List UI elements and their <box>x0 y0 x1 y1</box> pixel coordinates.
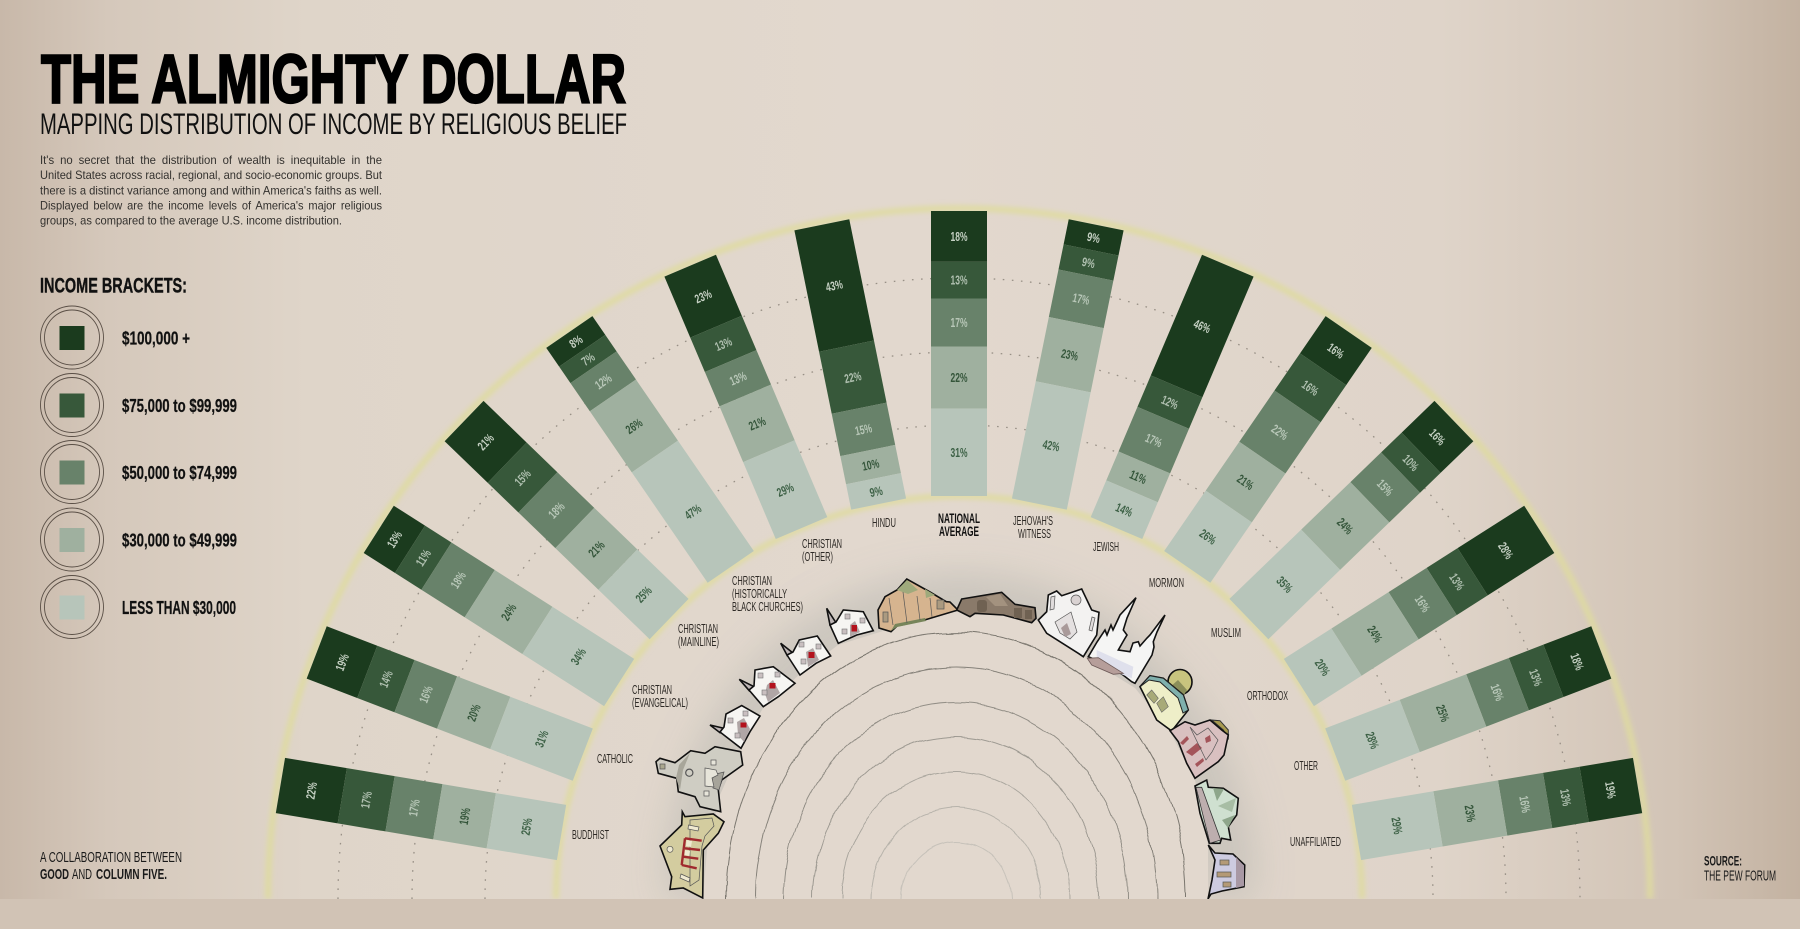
bar: Christian (Historically Black Churches): 12% <box>593 371 614 392</box>
label: Jehovah's Witness: JEHOVAH'S <box>1013 513 1053 528</box>
bar: Mormon: 22% <box>1269 422 1291 443</box>
bar: Unaffiliated: 19% <box>1602 780 1619 800</box>
bar: Jewish: 12% <box>1159 393 1180 412</box>
legend: $100,000 + <box>40 306 190 369</box>
credit: collaboration: AND <box>72 866 92 883</box>
bar: Christian (Mainline): 18% <box>546 500 568 521</box>
building: Christian (Mainline) church <box>739 667 795 707</box>
intro paragraph <box>40 153 383 228</box>
bar: Christian (Historically Black Churches): 26% <box>623 416 645 437</box>
label: Orthodox: ORTHODOX <box>1247 688 1288 703</box>
building: Buddhist temple <box>660 812 724 898</box>
bar: Hindu: 15% <box>854 421 873 438</box>
building: white church <box>1038 589 1099 657</box>
building: Christian (Evangelical) church <box>710 706 760 748</box>
bar: Mormon: 16% <box>1325 340 1347 362</box>
bar: Christian (Other) <box>664 255 827 539</box>
bar: Jewish: 46% <box>1191 317 1213 336</box>
bar: Catholic: 31% <box>532 728 552 749</box>
bar: Buddhist <box>276 758 566 860</box>
label: Catholic: CATHOLIC <box>597 751 633 766</box>
bar: Other: 13% <box>1526 667 1545 688</box>
bar: Muslim: 24% <box>1334 515 1356 537</box>
bar: Orthodox: 20% <box>1312 657 1333 679</box>
bar: Orthodox: 16% <box>1412 593 1433 615</box>
building: spired cathedral <box>1087 598 1165 683</box>
credit: collaboration <box>40 849 182 883</box>
bar: Christian (Mainline): 21% <box>475 431 497 453</box>
bar: Christian (Historically Black Churches): 7% <box>579 350 597 369</box>
bar: Jewish: 11% <box>1127 468 1149 487</box>
bar: Jehovah's Witness: 9% <box>1081 255 1096 271</box>
bar: Christian (Other): 13% <box>728 369 749 388</box>
label: Christian (Evangelical) <box>632 682 688 710</box>
bar: Unaffiliated: 13% <box>1557 788 1574 807</box>
intro paragraph: Displayed below are the income levels of America's major religious <box>40 198 382 212</box>
bar: Catholic: 20% <box>465 702 484 723</box>
bar: Hindu: 43% <box>825 277 844 295</box>
label: Christian (Other): (OTHER) <box>802 549 833 564</box>
label: Christian (Historically Black Churches): (HISTORICALLY <box>732 586 787 601</box>
building: Christian (Other) church <box>827 608 873 643</box>
credit: collaboration: GOOD <box>40 866 69 883</box>
label: National Average: AVERAGE <box>939 524 979 539</box>
label: Muslim: MUSLIM <box>1211 625 1241 640</box>
hill ground <box>703 610 1208 899</box>
bar: Jewish: 14% <box>1114 500 1135 520</box>
bar: Catholic <box>307 626 593 781</box>
bar: Mormon: 16% <box>1299 378 1321 399</box>
label: Christian (Historically Black Churches): CHRISTIAN <box>732 573 772 588</box>
bar: Buddhist: 17% <box>358 790 375 809</box>
bar: Jehovah's Witness: 42% <box>1041 437 1061 454</box>
bar: National Average: 31% <box>950 446 968 460</box>
bottom band <box>0 899 1800 929</box>
bar: Other: 25% <box>1433 703 1452 724</box>
bar: Orthodox: 28% <box>1495 540 1516 562</box>
bar: Hindu: 9% <box>868 484 884 500</box>
bar: Hindu: 22% <box>843 369 863 386</box>
bar: Jehovah's Witness <box>1012 219 1124 510</box>
label: Unaffiliated: UNAFFILIATED <box>1290 834 1341 849</box>
bar: Christian (Mainline): 25% <box>633 584 655 606</box>
bar: Mormon: 21% <box>1234 472 1256 493</box>
credit: source <box>1704 852 1776 884</box>
bar: Muslim: 10% <box>1400 452 1421 474</box>
label: Mormon: MORMON <box>1149 575 1184 590</box>
bar: National Average <box>931 211 987 496</box>
bar: Catholic: 19% <box>333 652 352 673</box>
bar: Jehovah's Witness: 17% <box>1071 291 1091 308</box>
bar: Christian (Other): 13% <box>713 335 734 354</box>
bar: Christian (Historically Black Churches): 47% <box>682 501 704 523</box>
label: Christian (Historically Black Churches): BLACK CHURCHES) <box>732 599 803 614</box>
bar: Christian (Evangelical): 24% <box>498 601 519 623</box>
subtitle: MAPPING DISTRIBUTION OF INCOME BY RELIGIOUS BELIEF <box>40 108 627 141</box>
title: THE ALMIGHTY DOLLAR <box>41 40 626 118</box>
label: Christian (Mainline): CHRISTIAN <box>678 621 718 636</box>
bar: Jewish <box>1091 255 1254 539</box>
grey halo around the buildings <box>690 599 1230 899</box>
bar: Muslim: 35% <box>1273 574 1295 596</box>
legend: less than $30,000: LESS THAN $30,000 <box>122 597 236 618</box>
intro paragraph: United States across racial, regional, and socio-economic groups. But <box>40 168 383 182</box>
label: Hindu: HINDU <box>872 515 896 530</box>
legend: less than $30,000 <box>40 576 236 638</box>
legend: $50,000 to $74,999 <box>40 440 237 504</box>
label: National Average <box>938 511 980 539</box>
credit: collaboration: COLUMN FIVE. <box>96 866 167 883</box>
bar: Buddhist: 17% <box>406 798 423 817</box>
building: Orthodox church <box>1170 720 1228 778</box>
bar: Jewish: 17% <box>1143 431 1164 450</box>
bar: Christian (Mainline): 21% <box>586 538 608 560</box>
building: Hindu temple <box>878 579 958 632</box>
bar: Christian (Evangelical): 13% <box>384 529 405 550</box>
bar: Jehovah's Witness: 9% <box>1086 230 1101 246</box>
label: Christian (Evangelical): (EVANGELICAL) <box>632 695 688 710</box>
building: lavender house <box>1208 845 1245 899</box>
label: Christian (Other) <box>802 536 842 564</box>
bar: Buddhist: 25% <box>519 817 535 836</box>
credit: collaboration: A COLLABORATION BETWEEN <box>40 849 182 866</box>
bar: National Average: 18% <box>950 230 968 244</box>
bar: Christian (Mainline) <box>445 401 689 639</box>
bar: Hindu <box>794 219 906 510</box>
bar: Muslim: 15% <box>1374 477 1396 499</box>
bar: National Average: 13% <box>950 274 968 288</box>
bar: Muslim: 16% <box>1426 426 1448 448</box>
bar: Christian (Mainline): 15% <box>512 467 534 489</box>
label: Christian (Historically Black Churches) <box>732 573 803 614</box>
bar: Other: 28% <box>1362 730 1382 751</box>
bar: Orthodox: 24% <box>1364 623 1385 645</box>
legend heading: INCOME BRACKETS: <box>40 274 187 298</box>
bar: Christian (Historically Black Churches): 8% <box>567 332 585 351</box>
bar: Christian (Evangelical): 18% <box>448 569 469 591</box>
bar: Christian (Other): 23% <box>693 287 714 306</box>
bar: Buddhist: 19% <box>457 807 473 826</box>
bar: Christian (Other): 29% <box>775 480 796 500</box>
intro paragraph: there is a distinct variance among and within America's faiths as well. <box>40 183 382 197</box>
building: domed mosque <box>1140 670 1192 731</box>
bar: Unaffiliated: 16% <box>1516 795 1533 814</box>
bar: Christian (Other): 21% <box>747 414 768 434</box>
bar: Unaffiliated <box>1352 758 1642 860</box>
label: Buddhist: BUDDHIST <box>572 827 609 842</box>
bar: Jehovah's Witness: 23% <box>1060 347 1079 364</box>
bar: Orthodox <box>1284 506 1554 706</box>
bar: Mormon: 26% <box>1197 527 1219 548</box>
bar: Other: 18% <box>1567 651 1586 672</box>
bar: Buddhist: 22% <box>303 781 320 800</box>
building: Jehovah's Witness hall <box>957 592 1036 623</box>
label: Christian (Evangelical): CHRISTIAN <box>632 682 672 697</box>
bar: Christian (Evangelical) <box>364 506 634 706</box>
bar: Unaffiliated: 29% <box>1388 816 1405 835</box>
bar: Muslim <box>1229 401 1473 639</box>
building: Catholic cathedral <box>656 747 743 812</box>
label: Jewish: JEWISH <box>1093 539 1119 554</box>
label: National Average: NATIONAL <box>938 511 980 526</box>
bar: Unaffiliated: 23% <box>1461 804 1478 823</box>
bar: Catholic: 14% <box>377 669 396 690</box>
label: Christian (Mainline) <box>678 621 719 649</box>
legend: $75,000 to $99,999: $75,000 to $99,999 <box>122 395 237 416</box>
wavy contour lines inside the hill <box>726 632 1186 899</box>
bar: Orthodox: 13% <box>1446 571 1467 593</box>
bar: National Average: 17% <box>950 316 968 330</box>
building: green-roofed hall <box>1195 780 1238 843</box>
legend: $30,000 to $49,999 <box>40 508 237 571</box>
building: Christian (Historically Black) church <box>781 636 831 675</box>
bar: Christian (Historically Black Churches) <box>546 316 754 583</box>
label: Christian (Other): CHRISTIAN <box>802 536 842 551</box>
dotted income grid arcs <box>338 278 1580 899</box>
bar: Hindu: 10% <box>861 457 880 474</box>
legend: $50,000 to $74,999: $50,000 to $74,999 <box>122 462 237 483</box>
bar: Mormon <box>1164 316 1372 583</box>
label: Jehovah's Witness <box>1013 513 1053 541</box>
intro paragraph: groups, as compared to the average U.S. income distribution. <box>40 214 342 228</box>
bar: Other: 16% <box>1487 682 1507 703</box>
legend: $30,000 to $49,999: $30,000 to $49,999 <box>122 530 237 550</box>
label: Christian (Mainline): (MAINLINE) <box>678 634 719 649</box>
label: Other: OTHER <box>1294 758 1318 773</box>
bar: Other <box>1325 626 1611 781</box>
legend: $75,000 to $99,999 <box>40 374 237 436</box>
bar: Christian (Evangelical): 11% <box>413 547 434 569</box>
bar: Christian (Evangelical): 34% <box>568 646 589 668</box>
legend: $100,000 +: $100,000 + <box>122 328 190 348</box>
bar: National Average: 22% <box>950 371 968 385</box>
glowing outer and inner arcs <box>268 208 1650 899</box>
intro paragraph: It's no secret that the distribution of wealth is inequitable in the <box>40 153 382 167</box>
bar: Catholic: 16% <box>417 684 436 705</box>
credit: source: SOURCE: <box>1704 852 1742 868</box>
label: Jehovah's Witness: WITNESS <box>1018 526 1051 541</box>
